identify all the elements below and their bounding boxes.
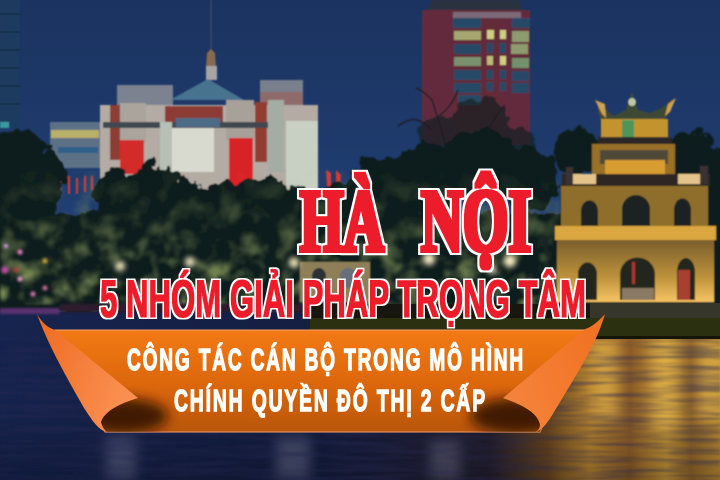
- banner text: [127, 341, 525, 418]
- decorative lights: [2, 244, 47, 296]
- pavilion behind trees: [300, 262, 370, 302]
- tall red hotel tower: [422, 0, 530, 145]
- lake water: [0, 303, 720, 480]
- distant red flags: [59, 170, 341, 194]
- right ribbon curl: [503, 314, 605, 432]
- street lamps: [115, 253, 516, 274]
- Turtle Tower: [555, 92, 716, 302]
- lit foliage texture: [0, 170, 560, 305]
- bare tree branches: [398, 88, 505, 190]
- background photo: Hanoi skyline: [0, 0, 720, 312]
- museum building: [100, 0, 318, 190]
- banner line 2: CHÍNH QUYỀN ĐÔ THỊ 2 CẤP: [174, 382, 487, 418]
- ribbon fold shadows: [76, 398, 562, 434]
- upper translucent tree crown: [416, 98, 539, 174]
- low annex building: [50, 122, 102, 168]
- tree canopy: [0, 128, 720, 312]
- title: Hà Nội: NỘI: [421, 171, 531, 271]
- left glass tower: [0, 0, 20, 128]
- left ribbon curl: [37, 314, 138, 432]
- ribbon body: [55, 330, 585, 432]
- orange ribbon banner: [37, 314, 605, 434]
- water ripples: [0, 338, 720, 480]
- background: night sky: [0, 0, 720, 320]
- title: Hà Nội: HÀ: [300, 172, 384, 271]
